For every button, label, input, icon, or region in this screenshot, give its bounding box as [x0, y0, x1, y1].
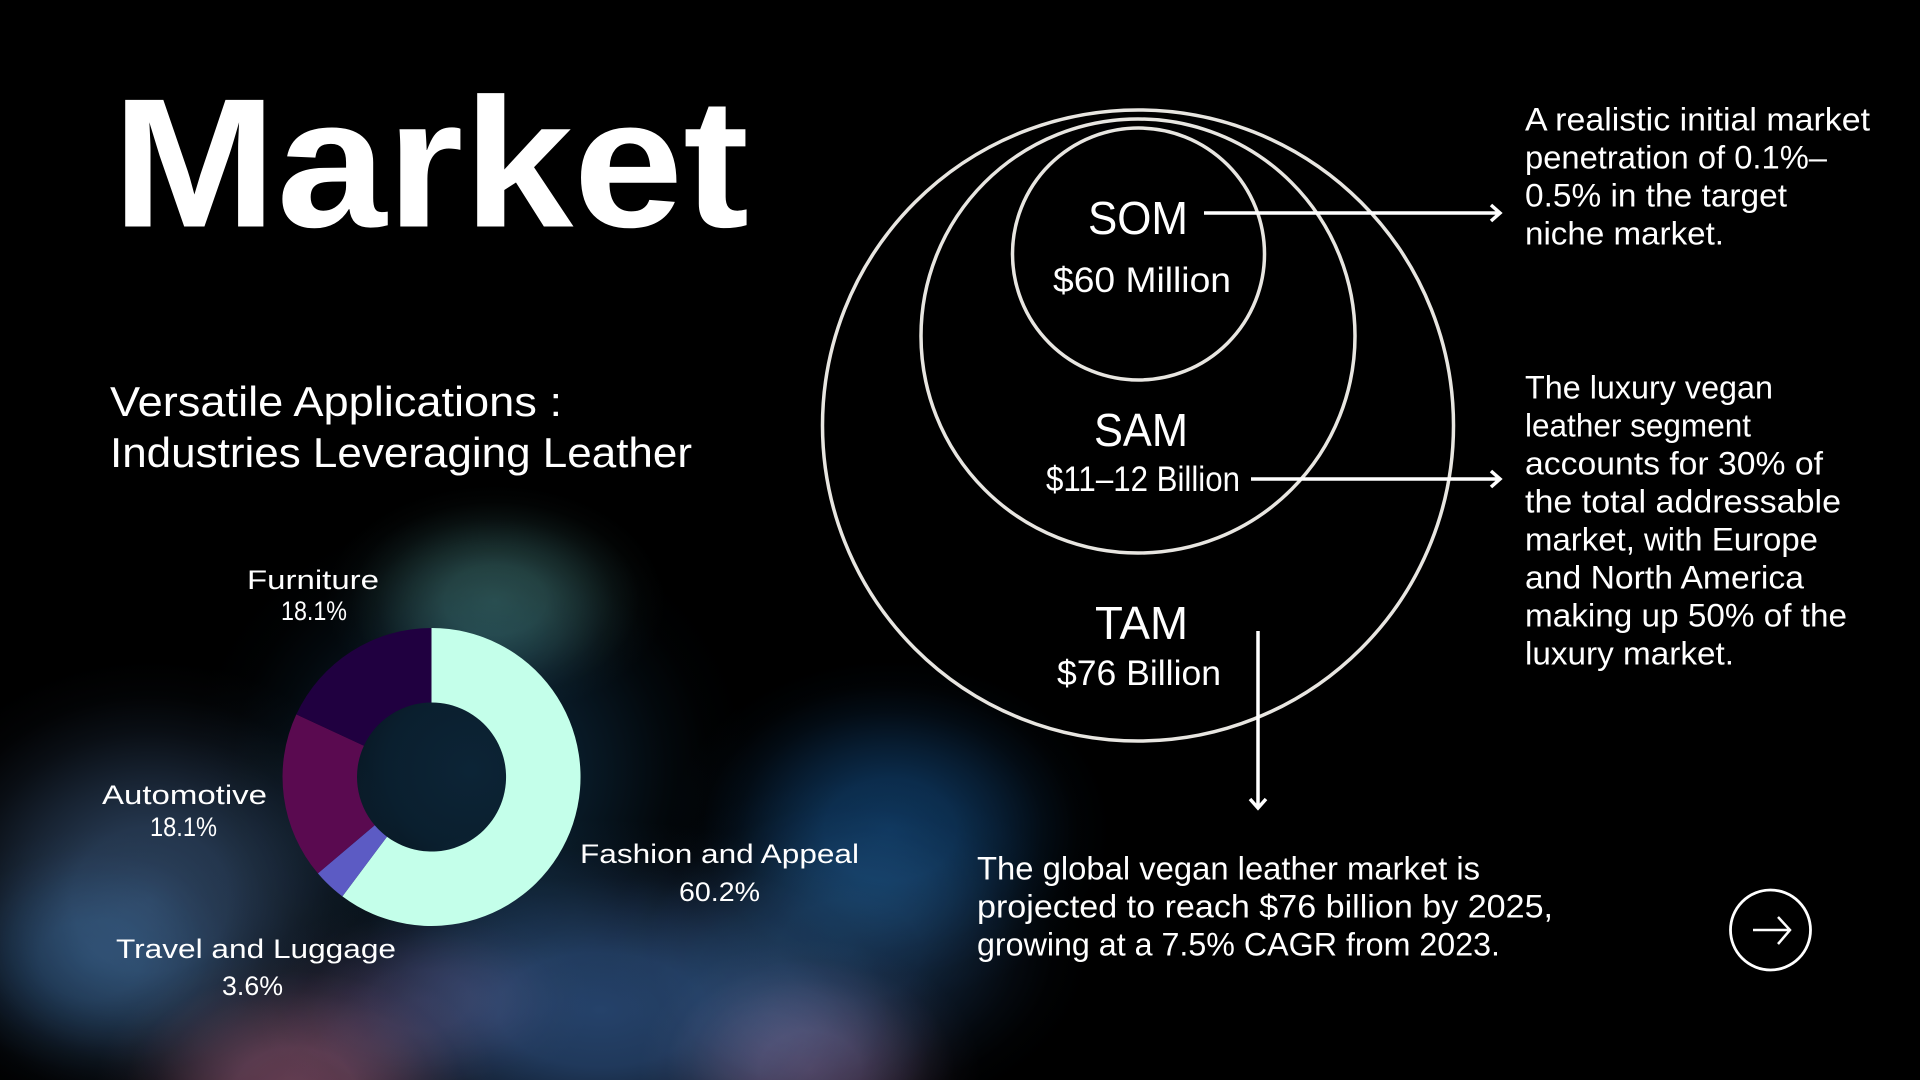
- label: SAM: [1046, 404, 1240, 499]
- text block: SAM description: [1525, 370, 1847, 672]
- nested market circles: [822, 110, 1454, 741]
- text block: SAM description: market, with Europe: [1525, 522, 1818, 558]
- circle: TAM: [822, 110, 1454, 741]
- chart heading: [110, 378, 692, 476]
- label: SAM: SAM: [1094, 404, 1188, 456]
- text block: SOM description: [1525, 102, 1870, 252]
- text block: SOM description: A realistic initial market: [1525, 102, 1870, 138]
- segment: Furniture: [296, 628, 432, 746]
- segment: Fashion and Appeal: [342, 628, 581, 926]
- label: Travel and Luggage: Travel and Luggage: [116, 934, 396, 964]
- circle: SAM: [921, 119, 1355, 553]
- label: Travel and Luggage: 3.6%: [222, 971, 283, 1001]
- label: Furniture: Furniture: [247, 565, 379, 595]
- text block: SOM description: 0.5% in the target: [1525, 178, 1787, 214]
- label: Fashion and Appeal: 60.2%: [679, 877, 760, 907]
- text block: SAM description: making up 50% of the: [1525, 598, 1847, 634]
- text block: SOM description: niche market.: [1525, 216, 1724, 252]
- text block: SAM description: luxury market.: [1525, 636, 1734, 672]
- label: Automotive: 18.1%: [150, 812, 217, 842]
- segment: Automotive: [283, 714, 375, 873]
- arrow: TAM to description: [1250, 631, 1266, 808]
- label: Automotive: [102, 780, 267, 842]
- label: SOM: [1053, 192, 1231, 300]
- label: Fashion and Appeal: Fashion and Appeal: [580, 839, 859, 869]
- circle: SOM: [1012, 128, 1264, 380]
- text block: SOM description: penetration of 0.1%–: [1525, 140, 1827, 176]
- label: Fashion and Appeal: [580, 839, 859, 907]
- text block: SAM description: and North America: [1525, 560, 1804, 596]
- label: TAM: TAM: [1095, 597, 1188, 649]
- label: TAM: [1057, 597, 1221, 693]
- text block: TAM description: [977, 850, 1553, 962]
- label: Travel and Luggage: [116, 934, 396, 1001]
- text block: SAM description: accounts for 30% of: [1525, 446, 1823, 482]
- text block: SAM description: the total addressable: [1525, 484, 1841, 520]
- donut chart: [102, 565, 859, 1001]
- label: Furniture: [247, 565, 379, 626]
- chart heading: Industries Leveraging Leather: [110, 429, 692, 476]
- icon: next arrow button: [1730, 890, 1810, 970]
- label: Furniture: 18.1%: [281, 596, 347, 626]
- label: SAM: $11–12 Billion: [1046, 460, 1240, 499]
- label: SOM: $60 Million: [1053, 261, 1231, 300]
- text block: TAM description: projected to reach $76 billion by 2025,: [977, 888, 1553, 924]
- arrow: SOM to description: [1204, 205, 1500, 221]
- text block: SAM description: The luxury vegan: [1525, 370, 1773, 406]
- segment: Travel and Luggage: [318, 825, 387, 896]
- arrow: SAM to description: [1251, 471, 1500, 487]
- text block: TAM description: The global vegan leather market is: [977, 850, 1480, 886]
- label: TAM: $76 Billion: [1057, 654, 1221, 693]
- text block: SAM description: leather segment: [1525, 408, 1751, 444]
- title: Market: [112, 60, 749, 266]
- label: Automotive: Automotive: [102, 780, 267, 810]
- label: SOM: SOM: [1088, 192, 1188, 244]
- chart heading: Versatile Applications :: [110, 378, 562, 425]
- text block: TAM description: growing at a 7.5% CAGR from 2023.: [977, 926, 1500, 962]
